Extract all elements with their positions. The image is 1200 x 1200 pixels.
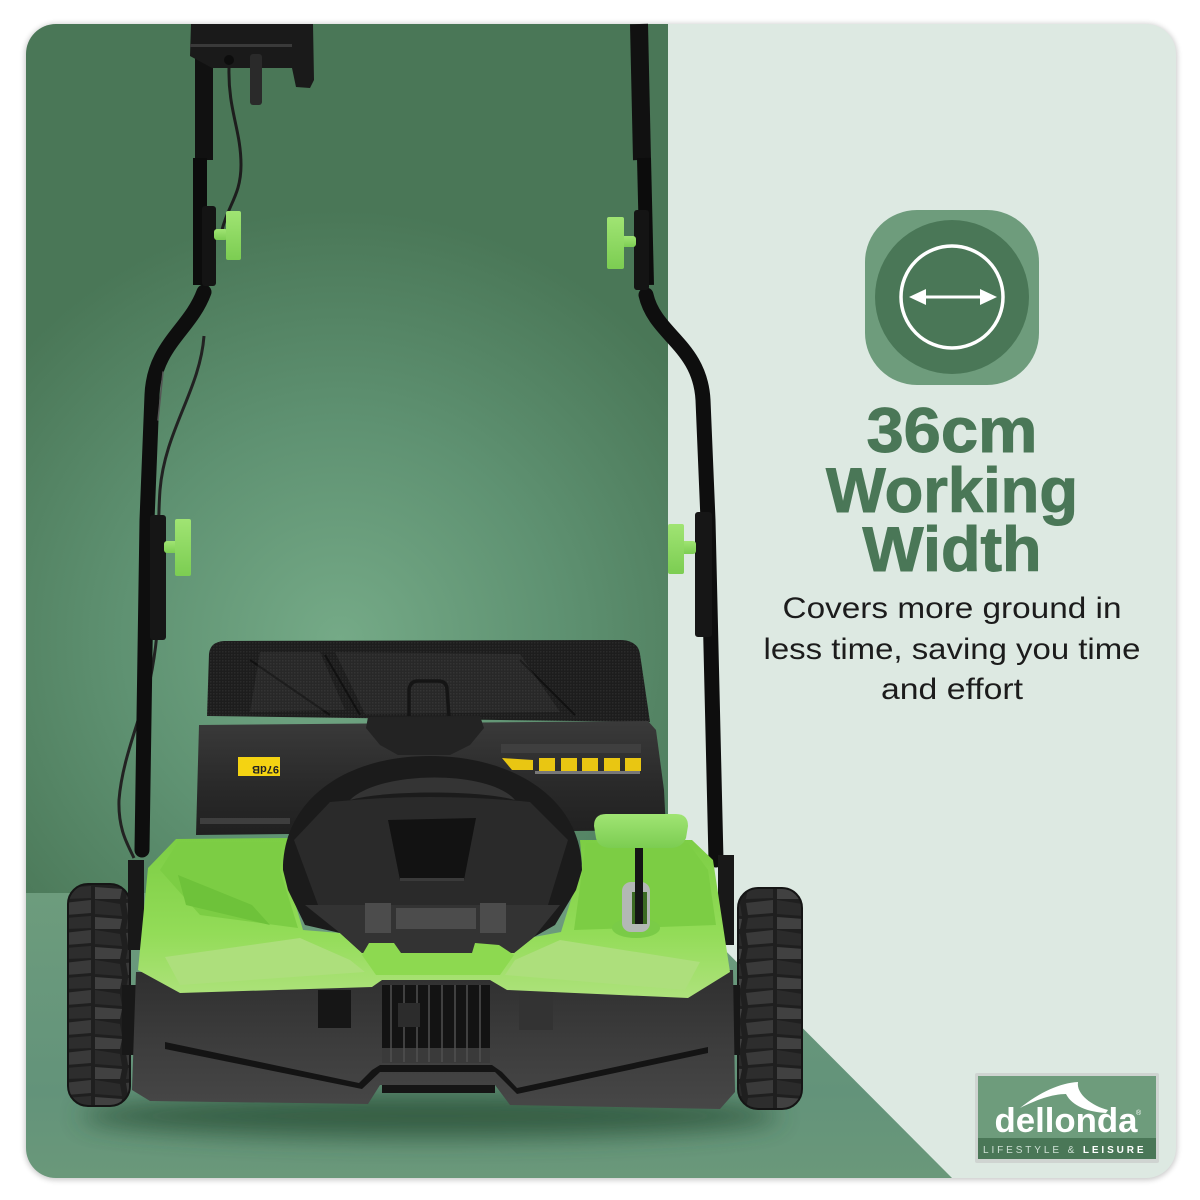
panel: green wall xyxy=(26,24,668,904)
centre vent with fins xyxy=(382,985,490,1063)
body text: and effort xyxy=(881,673,1024,706)
body text: Covers more ground in xyxy=(782,592,1122,625)
grass bag mesh xyxy=(207,640,650,722)
right lower bracket xyxy=(695,512,712,637)
left wheel xyxy=(68,884,130,1106)
knob: lower right xyxy=(668,524,696,574)
heading: 36cm xyxy=(866,396,1038,466)
knob: lower left xyxy=(164,519,191,576)
warning label: 97dB: 97dB xyxy=(252,763,279,775)
mower ground shadow xyxy=(80,1094,780,1138)
heading xyxy=(826,396,1078,585)
rear scarifier opening xyxy=(382,1085,495,1093)
left upper bracket xyxy=(202,206,216,286)
deck centre bridge xyxy=(362,943,514,975)
handle control box xyxy=(190,24,314,105)
logo: dellonda xyxy=(975,1073,1159,1163)
knob: upper left xyxy=(214,211,241,260)
knob: upper right xyxy=(607,217,636,269)
body text xyxy=(764,592,1140,706)
left handle xyxy=(142,30,204,850)
logo: dellonda: ® xyxy=(1136,1109,1142,1117)
logo wordmark: dellonda xyxy=(994,1102,1139,1140)
logo wave xyxy=(1020,1082,1108,1113)
panel: green floor xyxy=(26,893,976,1178)
lower housing xyxy=(132,970,735,1109)
dome base blocks xyxy=(365,903,506,933)
axle brackets xyxy=(122,855,740,1055)
right wheel xyxy=(738,888,802,1109)
logo tagline: LIFESTYLE & LEISURE xyxy=(983,1145,1146,1156)
left side vent xyxy=(318,990,351,1028)
height adjust lever xyxy=(594,814,688,938)
mower product image xyxy=(68,24,802,1109)
heading: Working xyxy=(826,456,1078,526)
cable: left upper xyxy=(222,68,241,230)
dome recess xyxy=(388,818,476,880)
deck right recess xyxy=(574,843,716,930)
bag handle loop xyxy=(409,681,449,716)
right side vent xyxy=(519,992,553,1030)
left lower bracket xyxy=(150,515,166,640)
icon: width arrow badge xyxy=(865,210,1039,385)
icon: double arrow xyxy=(909,289,997,305)
bag rigid body xyxy=(196,721,666,835)
bag clip xyxy=(366,716,484,755)
deck left recess xyxy=(160,842,298,928)
dome base xyxy=(305,905,560,953)
motor dome xyxy=(283,756,582,975)
green deck xyxy=(138,838,730,998)
panel: pale right panel xyxy=(668,24,1176,1178)
heading: Width xyxy=(862,515,1042,585)
deck lower highlight xyxy=(165,938,365,985)
housing crease xyxy=(165,1042,708,1094)
warning labels strip xyxy=(501,744,641,774)
warning label: 97dB xyxy=(238,757,280,776)
right handle xyxy=(639,24,716,860)
right upper bracket xyxy=(634,210,649,290)
body text: less time, saving you time xyxy=(764,633,1140,666)
cable: left lower xyxy=(119,336,204,858)
